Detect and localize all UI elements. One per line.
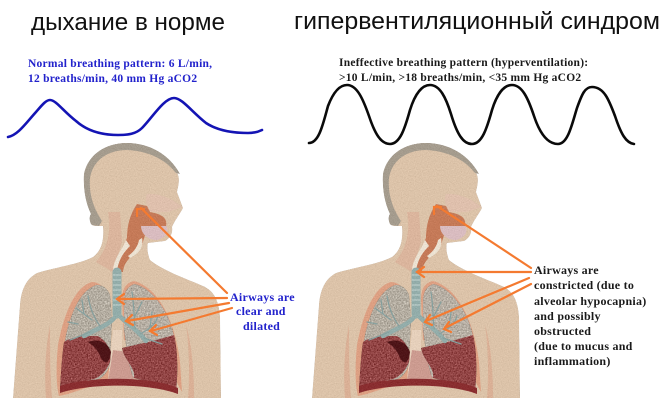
heading: normal breathing: дыхание в норме	[31, 9, 225, 36]
arrows: constricted airways	[417, 206, 531, 332]
callout: airways constricted and obstructed: alveolar hypocapnia)	[534, 294, 646, 308]
text block: ineffective breathing pattern: >10 L/min, >18 breaths/min, <35 mm Hg aCO2	[339, 72, 581, 84]
callout: airways constricted and obstructed: and possibly	[534, 309, 601, 323]
arrows: normal airways	[117, 208, 232, 335]
heading: hyperventilation syndrome: гипервентиляционный синдром	[294, 8, 660, 35]
text block: normal breathing pattern	[28, 58, 212, 85]
illustration: normal respiratory system	[13, 143, 221, 398]
callout: airways constricted and obstructed	[534, 263, 646, 368]
callout: airways constricted and obstructed: inflammation)	[534, 354, 611, 368]
text block: ineffective breathing pattern	[339, 57, 588, 84]
illustration: hyperventilation respiratory system	[312, 143, 520, 398]
text block: normal breathing pattern: Normal breathing pattern: 6 L/min,	[28, 58, 212, 70]
text block: normal breathing pattern: 12 breaths/min, 40 mm Hg aCO2	[28, 73, 197, 85]
callout: airways constricted and obstructed: obstructed	[534, 324, 591, 338]
callout: airways clear and dilated: dilated	[243, 319, 280, 333]
callout: airways constricted and obstructed: (due to mucus and	[534, 339, 633, 353]
callout: airways clear and dilated: clear and	[236, 304, 286, 318]
text block: ineffective breathing pattern: Ineffective breathing pattern (hyperventilation):	[339, 57, 588, 69]
chart: hyperventilation wave	[309, 85, 634, 144]
chart: normal breathing wave	[8, 98, 262, 137]
callout: airways constricted and obstructed: constricted (due to	[534, 278, 634, 292]
callout: airways clear and dilated: Airways are	[230, 290, 295, 304]
callout: airways constricted and obstructed: Airways are	[534, 263, 599, 277]
callout: airways clear and dilated	[230, 290, 295, 333]
